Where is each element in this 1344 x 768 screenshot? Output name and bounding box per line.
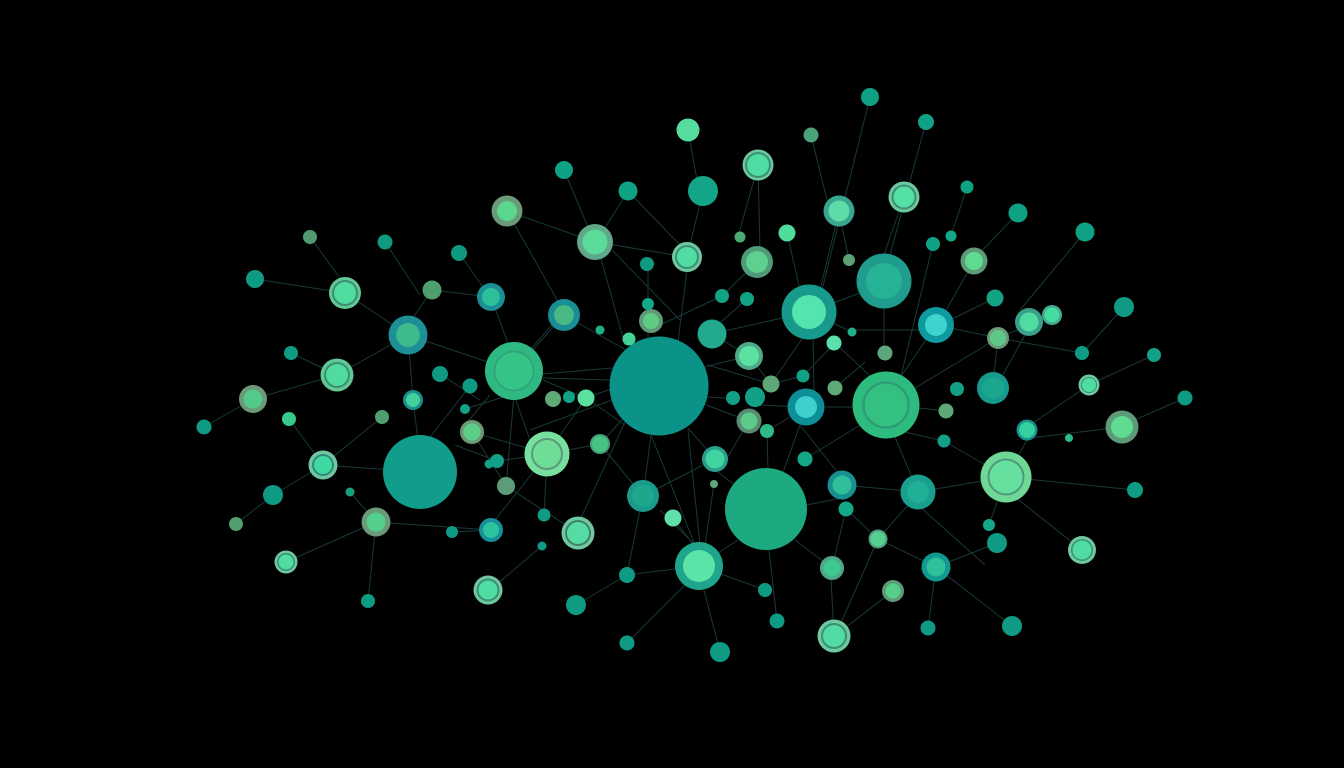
node: cyan core circle upper: [918, 307, 954, 343]
node: light green ringed circle: [980, 452, 1032, 502]
node: large green ringed circle right: [852, 372, 920, 438]
node: teal circle with mint core bottom: [675, 542, 723, 590]
node: large green circle bottom: [725, 468, 807, 550]
node: green ringed circle left: [485, 342, 543, 400]
nodes: medium teal and green circles: [388, 176, 1009, 582]
node: teal circle upper right: [856, 254, 912, 308]
node: cyan core circle centre: [788, 388, 824, 426]
nodes: small solid dots: [196, 88, 1192, 662]
node: teal circle with mint core: [782, 284, 836, 340]
node: large teal circle left: [383, 435, 457, 509]
nodes: ringed mint and olive circles: [239, 150, 1138, 652]
edges: connecting lines: [204, 97, 1185, 652]
node: central large teal hub: [610, 336, 708, 436]
node: pale green ringed circle: [524, 432, 570, 476]
